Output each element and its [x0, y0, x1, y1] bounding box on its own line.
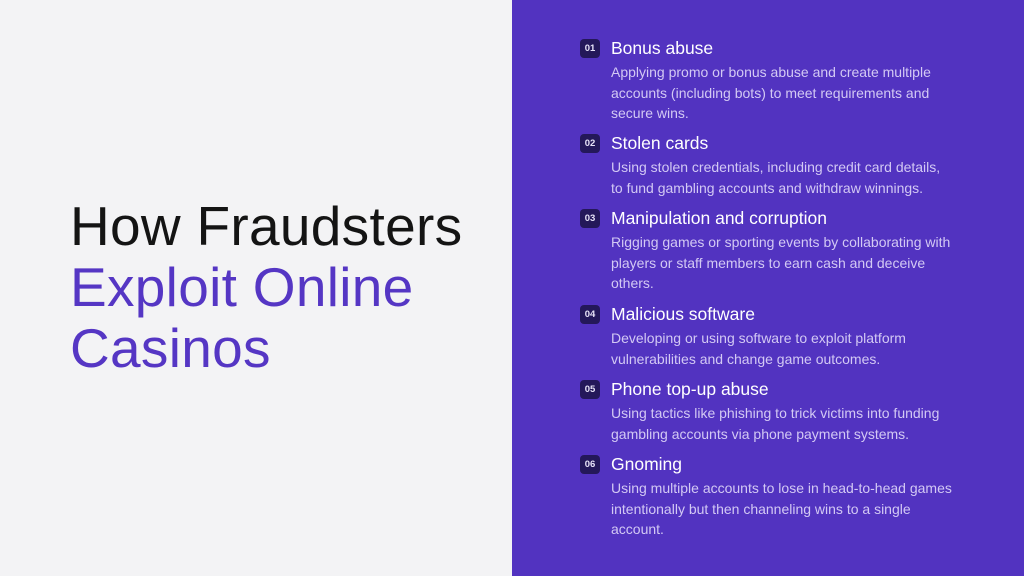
- panel: list: Stolen cards: [611, 133, 708, 153]
- item 06: [580, 454, 952, 537]
- panel: list: vulnerabilities and change game outcomes.: [611, 350, 880, 366]
- panel: list: Bonus abuse: [611, 38, 713, 58]
- panel: list: to fund gambling accounts and withdraw winnings.: [611, 180, 923, 196]
- item 02: [580, 133, 940, 196]
- panel: list: Rigging games or sporting events by collaborating with: [611, 234, 950, 250]
- panel: list: 01: [585, 43, 595, 54]
- panel: list: Applying promo or bonus abuse and create multiple: [611, 64, 931, 80]
- panel: list: intentionally but then channeling wins to a single: [611, 500, 911, 516]
- panel: list: others.: [611, 275, 654, 291]
- panel: list: Gnoming: [611, 454, 682, 474]
- panel: list: players or staff members to earn cash and deceive: [611, 254, 925, 270]
- panel: list: 02: [585, 138, 595, 149]
- panel: list: Using stolen credentials, including credit card details,: [611, 159, 940, 175]
- panel: list: Manipulation and corruption: [611, 208, 827, 228]
- panel: list: gambling accounts via phone payment systems.: [611, 426, 909, 442]
- item 03: [580, 208, 950, 291]
- panel: list: Developing or using software to exploit platform: [611, 330, 906, 346]
- panel: list: secure wins.: [611, 105, 689, 121]
- panel: list: Using tactics like phishing to trick victims into funding: [611, 405, 939, 421]
- title: How Fraudsters: [70, 195, 462, 257]
- panel: list: Phone top-up abuse: [611, 379, 769, 399]
- panel: list: 06: [585, 459, 595, 470]
- item 04: [580, 304, 906, 367]
- item 01: [580, 38, 931, 121]
- panel: list: account.: [611, 521, 664, 537]
- title: Casinos: [70, 317, 271, 379]
- item 05: [580, 379, 939, 442]
- panel: list: 05: [585, 384, 595, 395]
- panel: list: 04: [585, 309, 595, 320]
- panel: list: [512, 0, 1024, 576]
- panel: list: 03: [585, 213, 595, 224]
- panel: list: Using multiple accounts to lose in head-to-head games: [611, 480, 952, 496]
- panel: list: accounts (including bots) to meet requirements and: [611, 84, 929, 100]
- title: [70, 195, 462, 379]
- title: Exploit Online: [70, 256, 414, 318]
- panel: list: Malicious software: [611, 304, 755, 324]
